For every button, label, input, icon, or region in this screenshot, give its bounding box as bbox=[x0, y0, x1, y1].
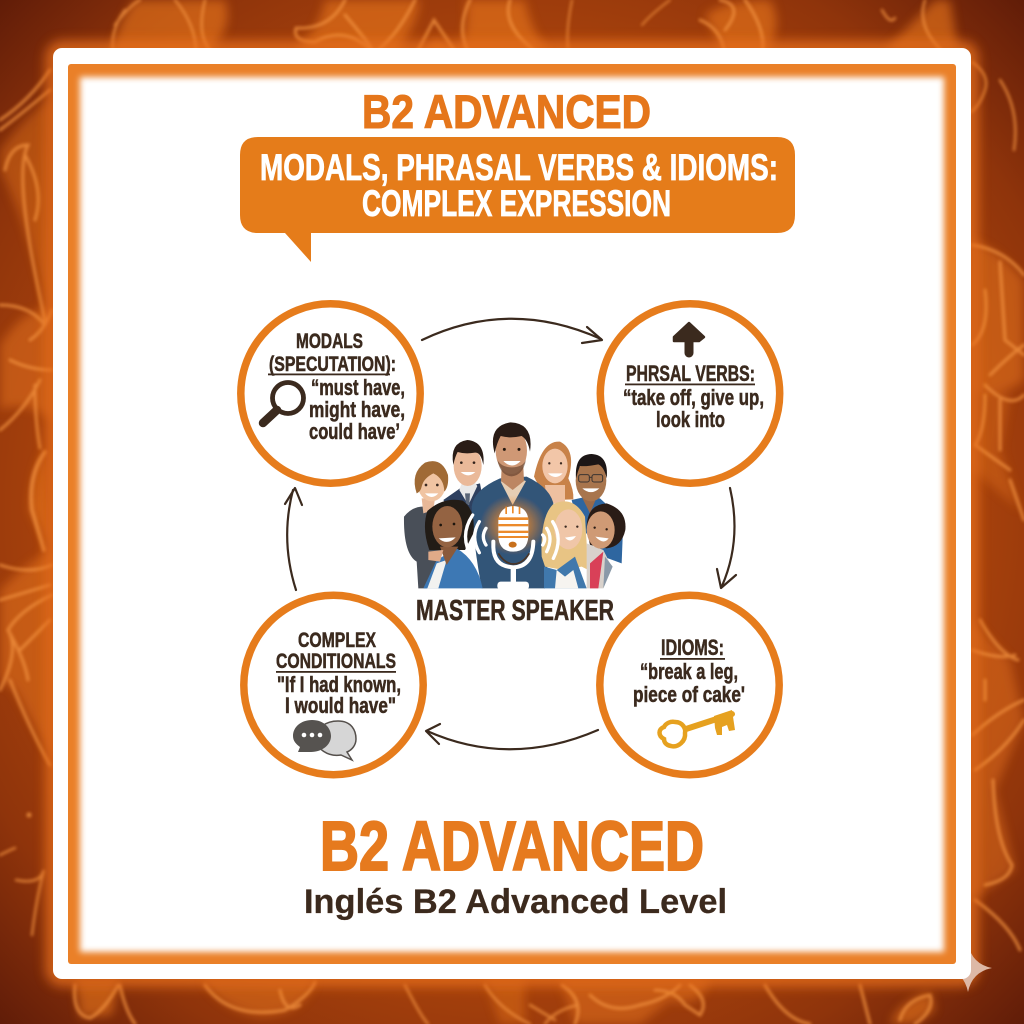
panel: complex conditionals circle: "If I had known, bbox=[277, 672, 401, 697]
center group: team of people bbox=[404, 422, 626, 590]
panel: complex conditionals circle: I would have" bbox=[285, 693, 396, 718]
icon: chat bubbles bbox=[293, 720, 356, 760]
arrow: idioms to complex conditionals bbox=[426, 724, 598, 749]
panel: idioms circle: “break a leg, bbox=[640, 659, 738, 684]
icon: up arrow bbox=[674, 323, 704, 353]
panel: modals circle: could have’ bbox=[309, 419, 400, 444]
icon: magnifying glass bbox=[263, 382, 304, 423]
man, dark suit bbox=[443, 440, 487, 520]
heading: B2 Advanced: B2 ADVANCED bbox=[362, 85, 651, 138]
man with glasses bbox=[572, 454, 623, 563]
icon: golden key bbox=[660, 710, 735, 746]
speech bubble banner: MODALS, PHRASAL VERBS & IDIOMS: bbox=[260, 147, 778, 188]
arrow: complex conditionals to modals bbox=[285, 488, 302, 590]
footer heading: B2 Advanced: B2 ADVANCED bbox=[320, 807, 704, 885]
panel: modals circle: (SPECUTATION): bbox=[269, 353, 396, 376]
panel: complex conditionals circle bbox=[244, 595, 423, 775]
woman, short brown hair bbox=[404, 461, 448, 588]
label: Master Speaker: MASTER SPEAKER bbox=[416, 595, 614, 627]
panel: modals circle: “must have, bbox=[311, 375, 405, 400]
panel: modals circle bbox=[241, 304, 420, 483]
panel: complex conditionals circle: CONDITIONALS bbox=[276, 650, 396, 673]
icon: studio microphone with sound waves bbox=[465, 495, 558, 590]
arrow: modals to phrasal verbs bbox=[422, 319, 602, 343]
panel: modals circle: MODALS bbox=[296, 330, 363, 353]
panel: idioms circle: piece of cake' bbox=[633, 682, 745, 707]
woman, dark hair and red top bbox=[587, 503, 626, 588]
blonde woman bbox=[541, 501, 588, 588]
panel: phrasal verbs circle: “take off, give up, bbox=[623, 385, 764, 410]
panel: phrasal verbs circle: look into bbox=[656, 407, 725, 432]
panel: complex conditionals circle: COMPLEX bbox=[298, 629, 376, 652]
speech bubble banner: COMPLEX EXPRESSION bbox=[362, 183, 671, 224]
woman in front, blue blazer bbox=[423, 500, 483, 588]
arrow: phrasal verbs to idioms bbox=[717, 488, 736, 588]
speech bubble banner bbox=[240, 137, 795, 262]
man in center, navy shirt bbox=[472, 422, 554, 588]
panel: idioms circle: IDIOMS: bbox=[661, 635, 724, 660]
inner orange border bbox=[68, 64, 956, 964]
panel: phrasal verbs circle: PHRSAL VERBS: bbox=[626, 361, 755, 386]
panel: phrasal verbs circle bbox=[600, 304, 780, 483]
woman, red hair bbox=[534, 442, 573, 503]
panel: idioms circle bbox=[600, 595, 779, 775]
footer subtitle: Inglés B2 Advanced Level bbox=[304, 883, 727, 921]
sparkle mark bbox=[944, 944, 992, 992]
panel: modals circle: might have, bbox=[309, 397, 405, 422]
